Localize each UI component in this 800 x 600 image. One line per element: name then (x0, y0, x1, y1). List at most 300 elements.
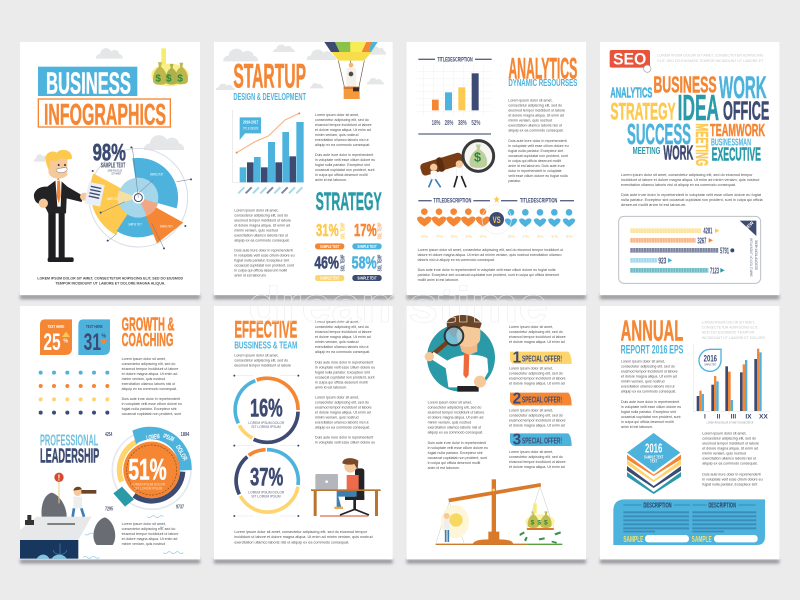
panel: striped bar chart: 4281 (703, 227, 713, 236)
text: right column: et dolore magna aliqua. Ut enim ad (315, 410, 371, 414)
text: left column: fugiat nulla pariatur. Excepteur sint (621, 410, 676, 414)
badge: versus (482, 205, 511, 234)
panel: striped bar chart: 923 (658, 256, 667, 265)
text: right column: et dolore magna aliqua. Ut enim ad (508, 114, 564, 118)
text: offer 3: et dolore magna aliqua. Ut enim ad (509, 465, 565, 469)
text: right column: eiusmod tempor incididunt ut labore (702, 442, 759, 446)
text: right column: aliquip ex ea commodo consequat. (315, 425, 370, 429)
text: left column: in voluptate velit esse cillum dolore eu (428, 446, 488, 450)
chart: pie diagram (89, 146, 192, 249)
text: right column: Duis aute irure dolor in reprehenderit (315, 153, 373, 157)
text: right column: pariatur. (508, 179, 521, 183)
text: right column: Duis aute irure dolor in reprehenderit (702, 472, 761, 476)
illustration: man with magnifier (425, 315, 495, 392)
text: right column: Duis aute irure dolor in reprehenderit (315, 435, 373, 439)
text: right column: in voluptate velit esse cillum dolore eu (702, 477, 763, 481)
word cloud: BUSINESSMAN (711, 137, 751, 148)
text: SEO paragraph: Lorem ipsum dolor sit amet, consectetur adipiscing elit, sed do eiusmod tempor (621, 173, 754, 177)
text: left column: fugiat nulla pariatur. Excepteur sint (234, 258, 289, 262)
text: left column: et dolore magna aliqua. Ut enim ad (621, 374, 677, 378)
panel: striped bar chart: 5791 (720, 246, 729, 255)
percent labels: 3% (465, 234, 473, 240)
bar chart: analytics: 52% (471, 120, 481, 127)
stat: 46 percent: SAMPLE TEXT (320, 276, 339, 281)
text: right column: aliquip ex ea commodo consequat. (508, 129, 564, 133)
heading: growth and coaching: GROWTH & (122, 314, 174, 335)
percent labels: 3% (566, 234, 573, 240)
ribbon: offer 2 (510, 390, 572, 407)
percent labels: 3% (450, 234, 458, 240)
text: offer 3: consectetur adipiscing elit, sed do (509, 455, 563, 459)
text: right column: anim id est laborum. Duis aute irure (508, 164, 565, 168)
panel: striped bar chart: SAMPLE TEXT OF LOREM IPSUM (750, 238, 754, 277)
text: right column: fugiat nulla pariatur. Excepteur sint (702, 482, 757, 486)
text: right column: fugiat nulla pariatur. Excepteur sint (315, 163, 370, 167)
text: bottom paragraph: labore et dolore magna aliqua. Ut enim ad minim veniam, quis nostrud exercitation ullamco (418, 253, 561, 257)
badge: 31 percent: % (101, 333, 106, 339)
word cloud (610, 69, 769, 166)
chart: pie diagram: SAMPLE TEXT (150, 171, 164, 176)
percent labels: 3% (421, 234, 429, 240)
chart: 51 percent radial: 4254 (105, 432, 113, 438)
subheading: report: REPORT 2016 EPS (621, 343, 683, 356)
divider (418, 132, 491, 136)
illustration: magnifier and log (419, 141, 494, 187)
text: SEO paragraph: nulla pariatur. Excepteur sint occaecat cupidatat non proident, sunt in culpa qui officia (621, 198, 763, 202)
bar chart: analytics (417, 65, 492, 127)
chart: 51 percent radial (105, 427, 192, 513)
text: right column: Lorem ipsum dolor sit amet, (315, 113, 359, 117)
text: bottom paragraph: Lorem ipsum dolor sit amet, consectetur adipiscing elit, sed do eiusmod tempor incididunt ut (418, 248, 563, 252)
text: intro: consectetur adipiscing elit, sed do (234, 358, 288, 362)
text: right column: in culpa qui officia deserunt mollit (508, 159, 561, 163)
text: bottom paragraph: et dolore magna aliqua. Ut enim ad (122, 537, 177, 541)
heading: business (38, 65, 137, 100)
ribbon: offer 3: 3 (513, 431, 521, 448)
chart: 51 percent radial: LOREM IPSUM DOLOR (132, 482, 165, 486)
text: right column: eiusmod tempor incididunt ut labore (508, 109, 565, 113)
chart: 16 percent ring: LOREM IPSUM DOLOR (248, 421, 285, 425)
text: left column: in voluptate velit esse cillum dolore eu (234, 253, 295, 257)
panel: SEO word cloud (600, 42, 779, 299)
stat: 98 percent (93, 139, 126, 176)
heading: growth and coaching (122, 314, 174, 350)
text: right column: minim veniam, quis nostrud (315, 415, 359, 419)
badge: SEO: SEO (613, 49, 646, 68)
text: left column: et dolore magna aliqua. Ut enim ad (428, 415, 483, 419)
text: right column: fugiat nulla pariatur. Excepteur sint (508, 149, 563, 153)
panel: description block: DESCRIPTION (643, 500, 672, 509)
text: offer intro: eiusmod tempor incididunt ut labore (509, 335, 566, 339)
text: SEO intro: LOREM IPSUM DOLOR SIT AMET, CONSECTETUR ADIPISCING (657, 54, 764, 58)
icon: money bags: $ (177, 73, 183, 84)
panel: effective business and team (214, 306, 393, 563)
word cloud: MEETING (692, 123, 712, 166)
illustration: balance scale: $ (537, 519, 541, 526)
illustration: balance scale: $ (544, 519, 548, 526)
word cloud: SUCCESS (627, 119, 691, 151)
badge: 31 percent: 31 (84, 329, 101, 356)
text: left column: in voluptate velit esse cillum dolore eu (621, 405, 681, 409)
text: offer 3: eiusmod tempor incididunt ut labore (509, 460, 566, 464)
stat: 58 percent (352, 252, 384, 281)
text: left column: eiusmod tempor incididunt ut labore (234, 218, 291, 222)
heading: annual: ANNUAL (621, 316, 683, 348)
text: right column: fugiat nulla pariatur. Excepteur sint (315, 370, 370, 374)
bar chart: growth (232, 110, 304, 193)
text: cover caption: LOREM IPSUM DOLOR SIT AMET, CONSECTETUR ADIPISCING ELIT, SED DO EIUSMOD (37, 276, 183, 280)
illustration: magnifier and log: $ (474, 150, 481, 164)
text: left column: exercitation ullamco laboris nisi ut (428, 425, 481, 429)
badge: 2016: SAMPLE TEXT (704, 363, 716, 367)
chart: pie diagram: SAMPLE TEXT (160, 223, 173, 228)
subheading: business and team: BUSSINESS & TEAM (234, 341, 297, 352)
text: right column: in voluptate velit esse cillum dolore eu (508, 144, 569, 148)
text: right column: minim veniam, quis nostrud (315, 133, 359, 137)
text: right column: occaecat cupidatat non proident, sunt (508, 154, 568, 158)
subheading: design and development: DESIGN & DEVELOPMENT (233, 92, 306, 103)
text: offer 2: Lorem ipsum dolor sit amet, (509, 408, 553, 412)
stat: 31 percent: 31% (316, 220, 339, 240)
text: SEO paragraph: deserunt mollit anim id est laborum. (621, 203, 686, 207)
text: left column: fugiat nulla pariatur. Excepteur sint (428, 451, 483, 455)
text: top paragraph: aliquip ex ea commodo consequat. (122, 387, 177, 391)
text: left column: Duis aute irure dolor in reprehenderit (234, 248, 293, 252)
dot matrix (39, 371, 109, 415)
icon: money bags: $ (155, 73, 161, 84)
text: cover caption: TEMPOR INCIDIDUNT UT LABORE ET DOLORE MAGNA ALIQUA. (55, 282, 165, 286)
text: offer 2: et dolore magna aliqua. Ut enim ad (509, 423, 565, 427)
text: bottom paragraph: incididunt ut labore et dolore magna aliqua. Ut enim ad minim veniam, quis nostrud (234, 535, 373, 539)
illustration: balance scale: $ (531, 519, 535, 526)
icons: orange people (417, 208, 490, 227)
stat: 98 percent: SIT AMET (111, 173, 122, 176)
panel: business infographics cover: SAMPLE TEXT (101, 160, 126, 169)
section titles: TITLEDESCRIPTION (433, 197, 471, 204)
word cloud: STRATEGY (610, 98, 676, 125)
badge: 25 percent: 25 (43, 329, 61, 356)
badge: 31 percent (78, 319, 110, 356)
text: intro: Lorem ipsum dolor sit amet, (234, 353, 278, 357)
panel: striped bar chart: 3267 (697, 236, 707, 245)
text: left column: exercitation ullamco laboris nisi ut (234, 233, 288, 237)
text: left column: in culpa qui officia deserunt mollit (621, 420, 674, 424)
text: left column: aliquip ex ea commodo consequat. (428, 430, 483, 434)
text: top paragraph: in voluptate velit esse cillum dolore eu (122, 402, 182, 406)
panel: business infographics cover (20, 42, 200, 299)
stat: 31 percent: SAMPLE TEXT (320, 244, 339, 249)
text: right column: consectetur adipiscing elit, sed do (702, 437, 756, 441)
text: right column: consectetur adipiscing elit, sed do (508, 104, 562, 108)
badge: 31 percent: TEXT HERE (86, 324, 103, 329)
panel: striped bar chart: DESCRIPTION HERE (754, 239, 758, 270)
badge: versus: VS (493, 215, 501, 225)
panel: growth and leadership: LEADERSHIP (40, 446, 99, 468)
text: right column: consectetur adipiscing elit, sed do (315, 400, 369, 404)
text: left column: aliquip ex ea commodo consequat. (234, 238, 290, 242)
illustration: balance scale (436, 479, 562, 544)
character: businessman (34, 150, 105, 262)
text: right column: eiusmod tempor incididunt ut labore (315, 330, 372, 334)
icon: money bags (151, 48, 189, 86)
text: SEO paragraph: incididunt ut labore et dolore magna aliqua. Ut enim ad minim veniam, quis nostrud (621, 178, 759, 182)
stat: 98 percent: LOREM IPSUM DOLOR (107, 171, 122, 173)
text: grey intro: INCIDIDUNT UT LABORE ET DOLORE (702, 336, 766, 340)
text: right column: Lorem ipsum dolor sit amet, (702, 432, 746, 436)
ribbon: offer 1: SPECIAL OFFER! (522, 354, 562, 364)
text: bottom paragraph: mollit anim id est laborum. (418, 278, 459, 282)
icon: layered diamond stack: SAMPLE TEXT (644, 454, 663, 459)
ribbon: offer 3 (510, 431, 572, 448)
percent labels: 7% (436, 234, 443, 240)
text: right column: Lorem ipsum dolor sit amet, (315, 395, 359, 399)
text: right column: Lorem ipsum dolor sit amet, (315, 320, 359, 324)
text: offer intro: et dolore magna aliqua. Ut enim ad (509, 340, 565, 344)
stat: 58 percent: 58% (352, 252, 377, 272)
panel: analytics (407, 42, 586, 299)
text: left column: exercitation ullamco laboris nisi ut (621, 384, 675, 388)
text: offer 2: consectetur adipiscing elit, sed do (509, 413, 563, 417)
text: SEO paragraph: exercitation ullamco laboris nisi ut aliquip ex ea commodo consequat. (621, 183, 736, 187)
text: right column: eiusmod tempor incididunt ut labore (315, 123, 372, 127)
text: bottom paragraph: pariatur. Excepteur sint occaecat cupidatat non proident, sunt in culpa qui officia deserunt (418, 273, 559, 277)
text: left column: consectetur adipiscing elit, sed do (234, 213, 288, 217)
stat: 17 percent: SAMPLE TEXT (357, 244, 377, 249)
stat: 17 percent (352, 220, 384, 249)
bar chart: analytics: 28% (445, 120, 454, 127)
text: left column: in culpa qui officia deserunt mollit (428, 461, 480, 465)
text: right column: in voluptate velit esse cillum dolore eu (315, 158, 375, 162)
text: left column: Duis aute irure dolor in reprehenderit (621, 400, 679, 404)
panel: description block (613, 499, 765, 545)
stat: 17 percent: SOL TEMP (378, 222, 384, 239)
bar chart: annual: IX (745, 413, 752, 420)
text: bottom paragraph: Lorem ipsum dolor sit amet, (122, 522, 166, 526)
panel: growth and leadership (20, 306, 200, 563)
text: left column: et dolore magna aliqua. Ut enim ad (234, 223, 290, 227)
word cloud: WORK (663, 141, 693, 164)
text: right column: exercitation ullamco laboris nisi ut (702, 457, 756, 461)
text: right column: consectetur adipiscing elit, sed do (315, 118, 369, 122)
percent labels: 3% (480, 234, 487, 240)
badge: 25 percent (40, 319, 72, 356)
percent labels (421, 234, 573, 240)
subheading: dynamic resources: DYNAMIC RESOURSES (508, 78, 578, 89)
text: right column: Duis aute irure dolor in reprehenderit (315, 360, 373, 364)
text: top paragraph: consectetur adipiscing elit, sed do (122, 362, 175, 366)
bar chart: annual: I (704, 413, 706, 420)
badge: 25 percent: % (63, 339, 68, 345)
text: left column: anim id est laborum. (621, 425, 653, 429)
bar chart: analytics: 18% (432, 120, 441, 127)
text: bottom paragraph: exercitation ullamco laboris nisi ut aliquip ex ea commodo consequat. (234, 541, 349, 545)
text: top paragraph: Lorem ipsum dolor sit amet, (122, 357, 166, 361)
bar chart: annual: LOREM IPSUM DOLOR SIT AMET CONSECTETUR (707, 420, 753, 424)
word cloud: BUSINESS (653, 72, 717, 98)
text: offer 2: eiusmod tempor incididunt ut labore (509, 418, 566, 422)
chart title: TITLEDESCRIPTION (437, 57, 473, 64)
ribbon: offer 3: SPECIAL OFFER! (522, 435, 562, 445)
panel: striped bar chart: 7123 (710, 266, 719, 275)
watermark: dreamstime (248, 277, 548, 333)
ribbon: offer 1: 1 (513, 350, 522, 367)
text: right column: aliquip ex ea commodo consequat. (315, 143, 370, 147)
text: top paragraph: occaecat cupidatat non proident, sunt (122, 412, 181, 416)
heading: infographics: INFOGRAPHICS (44, 98, 166, 131)
text: offer 1: eiusmod tempor incididunt ut labore (509, 377, 566, 381)
text: bottom paragraph: eiusmod tempor incididunt ut labore (122, 532, 178, 536)
chart: 51 percent radial: 1894 (181, 432, 190, 438)
cloud group (34, 48, 184, 162)
text: right column: eiusmod tempor incididunt ut labore (315, 405, 372, 409)
text: ANALYTICS (508, 52, 577, 85)
text: right column: in culpa qui officia deserunt mollit (315, 380, 368, 384)
bar chart: annual: II (717, 413, 721, 420)
bar chart: growth: TITLE DESCR (243, 125, 258, 130)
text: SEO intro: ELIT, SED DO EIUSMOD TEMPOR INCIDIDUNT UT LABORE ET (657, 59, 764, 63)
text: left column: occaecat cupidatat non proident, sunt (428, 456, 487, 460)
text: bottom paragraph: Duis aute irure dolor in reprehenderit in voluptate velit esse cillum dolore eu fugiat nulla (418, 268, 556, 272)
text: right column: velit esse cillum dolore eu fugiat nulla (508, 174, 568, 178)
heading: business: BUSINESS (46, 65, 131, 100)
percent labels: 7% (522, 234, 530, 240)
text: right column: exercitation ullamco laboris nisi ut (315, 420, 369, 424)
text: top paragraph: eiusmod tempor incididunt ut labore (122, 367, 178, 371)
panel: growth and leadership: PROFESSIONAL (40, 433, 98, 450)
bar chart: annual (693, 343, 770, 424)
heading: infographics (38, 98, 170, 131)
text: left column: Duis aute irure dolor in reprehenderit (428, 441, 486, 445)
bar chart: analytics: 38% (458, 120, 467, 127)
stat: 46 percent (314, 252, 346, 281)
panel: startup and strategy (214, 42, 393, 299)
stat: 17 percent: 17% (354, 220, 377, 240)
chart: 37 percent ring: LOREM IPSUM DOLOR (248, 491, 285, 495)
illustration: hot air balloon (324, 42, 378, 99)
text: offer 1: et dolore magna aliqua. Ut enim ad (509, 382, 565, 386)
text: top paragraph: Duis aute irure dolor in reprehenderit (122, 397, 180, 401)
percent labels: 3% (508, 234, 515, 240)
word cloud: IDEA (678, 87, 719, 128)
text: right column: minim veniam, quis nostrud (702, 452, 746, 456)
text: right column: in voluptate velit esse cillum dolore eu (315, 440, 375, 444)
panel: striped bar chart (619, 216, 761, 283)
chart: pie diagram: SAMPLE TEXT (107, 196, 119, 201)
chart: 16 percent ring (235, 378, 298, 442)
bar chart: annual: III (731, 413, 736, 420)
cloud group (216, 45, 386, 90)
chart: 37 percent ring: SIT LOREM IPSUM (251, 495, 281, 499)
text: left column: consectetur adipiscing elit, sed do (428, 405, 481, 409)
text: offer intro: Lorem ipsum dolor sit amet, (509, 325, 553, 329)
text: right column: exercitation ullamco laboris nisi ut (508, 124, 562, 128)
text: right column: exercitation ullamco laboris nisi ut (315, 345, 369, 349)
heading: growth and coaching: COACHING (122, 329, 173, 350)
badge: 2016: 2016 (704, 354, 717, 364)
panel: startup and strategy: STARTUP (233, 57, 306, 95)
text: right column: aliquip ex ea commodo consequat. (702, 462, 758, 466)
chart: 51 percent radial: LOREM (146, 433, 160, 442)
stat: 31 percent (315, 220, 346, 249)
text: right column: minim veniam, quis nostrud (508, 119, 552, 123)
ribbon: offer 2: SPECIAL OFFER! (522, 395, 562, 405)
text: right column: occaecat cupidatat non proident, sunt (315, 375, 374, 379)
text: right column: anim id est laborum. (315, 178, 347, 182)
text: offer 1: Lorem ipsum dolor sit amet, (509, 367, 553, 371)
text: offer 1: consectetur adipiscing elit, sed do (509, 372, 563, 376)
text: left column: minim veniam, quis nostrud (428, 420, 471, 424)
text: left column: minim veniam, quis nostrud (621, 379, 665, 383)
text: left column: aliquip ex ea commodo consequat. (621, 389, 676, 393)
text: right column: in culpa qui officia deserunt mollit (315, 173, 368, 177)
chart title (418, 57, 492, 64)
percent labels: 1% (551, 234, 559, 240)
section titles (418, 196, 574, 204)
illustration: person at desk (311, 458, 381, 516)
stat: 58 percent: SAMPLE TEXT (357, 276, 377, 281)
text: bottom paragraph: laboris nisi ut aliquip ex ea commodo consequat. (418, 258, 495, 262)
chart: 37 percent ring: 37% (250, 464, 283, 492)
chart: 51 percent radial: 9737 (176, 504, 184, 510)
text: right column: anim id est laborum. (315, 385, 347, 389)
panel: description block: SAMPLE (623, 534, 643, 544)
text: grey intro: LOREM IPSUM DOLOR SIT AMET, (702, 320, 755, 324)
text: right column: Lorem ipsum dolor sit amet, (508, 99, 552, 103)
stat: 58 percent: SOL TEMP (378, 254, 384, 271)
text: left column: minim veniam, quis nostrud (234, 228, 278, 232)
panel: striped bar chart: NEW (744, 220, 755, 231)
text: right column: et dolore magna aliqua. Ut enim ad (702, 447, 758, 451)
illustration: ship with lookout: ! (58, 473, 60, 482)
heading: professional leadership (40, 433, 99, 468)
stat: 46 percent: SOL TEMP (340, 254, 346, 271)
text: top paragraph: minim veniam, quis nostrud (122, 377, 165, 381)
text: offer intro: consectetur adipiscing elit, sed do (509, 330, 563, 334)
panel: annual report (600, 306, 779, 563)
panel: description block: SAMPLE (692, 534, 712, 544)
icon: money bags: $ (166, 73, 172, 84)
text: right column: aliquip ex ea commodo consequat. (315, 350, 370, 354)
text: bottom paragraph: minim veniam, quis nostrud (122, 542, 165, 546)
chart: 51 percent radial: SIT LOREM IPSUM (134, 487, 162, 491)
stat: 46 percent: 46% (314, 252, 339, 272)
chart: pie diagram: SAMPLE TEXT (128, 222, 142, 227)
text: top paragraph: exercitation ullamco laboris nisi ut (122, 382, 175, 386)
word cloud: MEETING (633, 146, 660, 157)
text: grey intro: SED DO EIUSMOD TEMPOR (702, 331, 755, 335)
text: left column: eiusmod tempor incididunt ut labore (428, 410, 484, 414)
panel: special offers and scale (407, 306, 586, 563)
text: top paragraph: et dolore magna aliqua. Ut enim ad (122, 372, 177, 376)
badge: 25 percent: TEXT HERE (48, 324, 64, 329)
text: offer 3: Lorem ipsum dolor sit amet, (509, 450, 553, 454)
text: right column: exercitation ullamco laboris nisi ut (315, 138, 369, 142)
text: right column: minim veniam, quis nostrud (315, 340, 359, 344)
illustration: ship with lookout (20, 473, 183, 559)
chart: 51 percent radial: DOLOR (174, 444, 188, 462)
section titles: TITLEDESCRIPTION (520, 197, 557, 204)
text: left column: in culpa qui officia deserunt mollit (234, 268, 287, 272)
stat: 31 percent: SOL TEMP (340, 222, 346, 239)
chart: 37 percent ring (236, 450, 298, 512)
text: right column: et dolore magna aliqua. Ut enim ad (315, 128, 371, 132)
text: left column: occaecat cupidatat non proident, sunt (234, 263, 294, 267)
text: left column: Lorem ipsum dolor sit amet, (234, 208, 278, 212)
separators with dots (233, 375, 299, 517)
chart: 51 percent radial: 51% (128, 453, 167, 486)
stat: 98 percent: 98% (93, 139, 126, 166)
text: right column: dolor in reprehenderit in voluptate (508, 169, 562, 173)
